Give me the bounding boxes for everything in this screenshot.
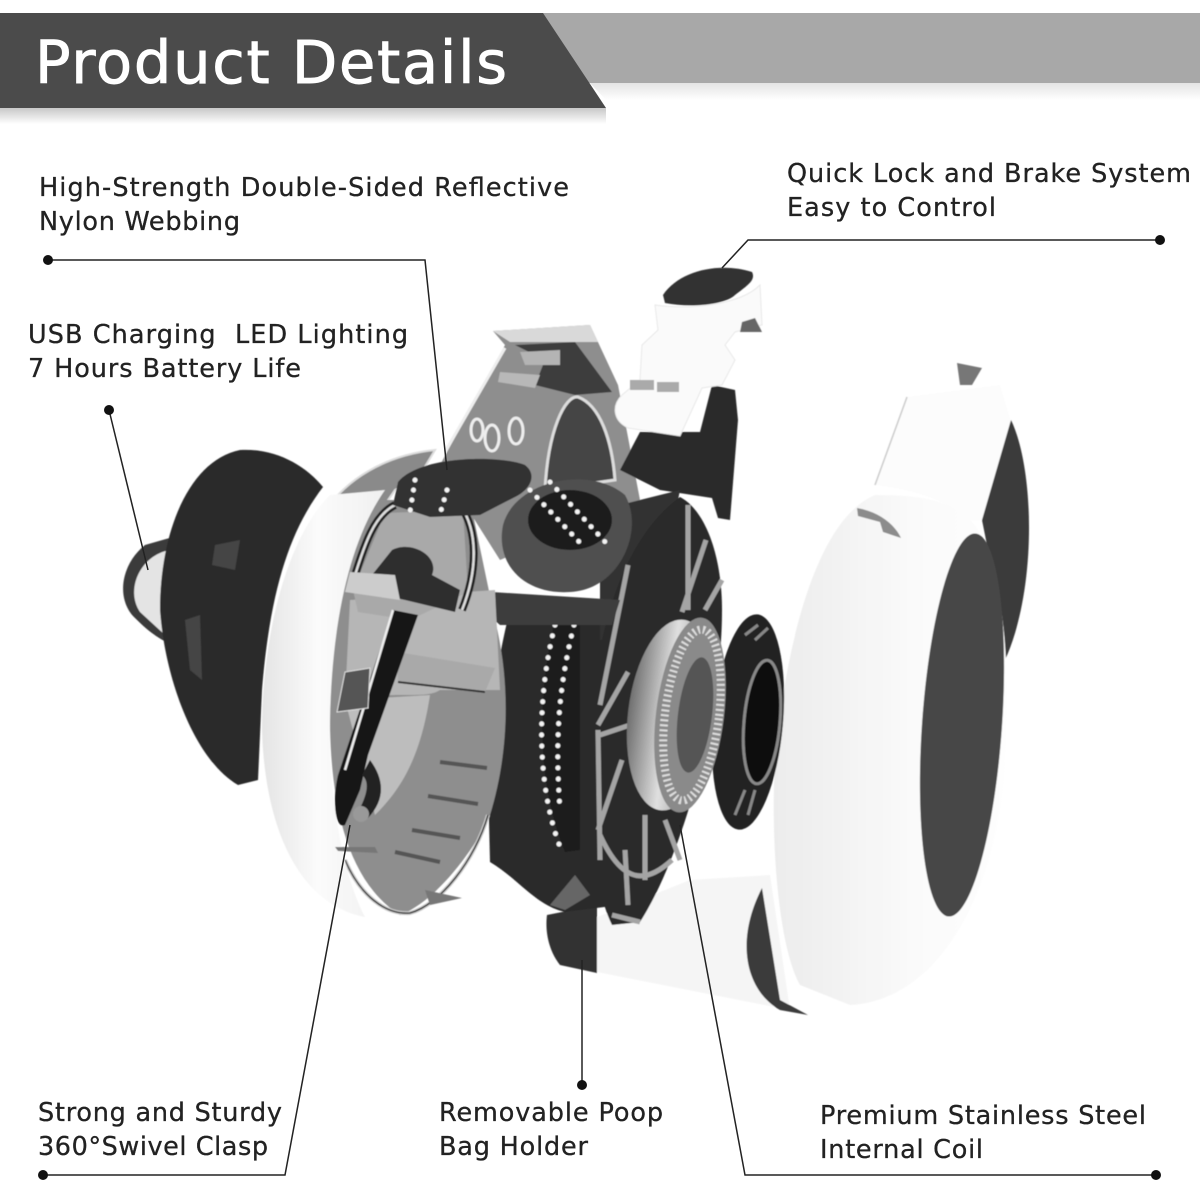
- callout: USB charging: [28, 320, 408, 570]
- poop bag holder: [546, 875, 808, 1015]
- front white shell: [262, 490, 506, 917]
- callout: USB charging: 7 Hours Battery Life: [28, 354, 301, 384]
- reel and reflective webbing: [488, 610, 620, 912]
- callout: USB charging: USB Charging LED Lighting: [28, 320, 408, 350]
- product illustration: [123, 268, 1029, 1015]
- right shell: [774, 363, 1029, 1005]
- callout: coil: [680, 825, 1161, 1180]
- callout: swivel clasp: [38, 825, 350, 1180]
- header banner: [0, 13, 1200, 124]
- stainless steel coil: [617, 614, 736, 816]
- callout: swivel clasp: Strong and Sturdy: [38, 1098, 282, 1128]
- callout: bag holder: Bag Holder: [439, 1132, 589, 1162]
- callout: reflective webbing: High-Strength Double-Sided Reflective: [39, 173, 569, 203]
- title: Product Details: [35, 28, 507, 97]
- swivel clasp and D-ring: [335, 459, 532, 826]
- callout: quick lock: Easy to Control: [787, 193, 996, 223]
- rear housing shell with holes: [325, 325, 640, 560]
- brake lever: [615, 268, 762, 520]
- callout: bag holder: Removable Poop: [439, 1098, 663, 1128]
- callout: swivel clasp: 360°Swivel Clasp: [38, 1132, 268, 1162]
- callout: coil: Internal Coil: [820, 1135, 983, 1165]
- callout: reflective webbing: [39, 173, 569, 470]
- reel frame with spokes: [591, 490, 722, 925]
- rear hub: [704, 611, 792, 833]
- callout: quick lock: [722, 159, 1191, 268]
- spool hub: [460, 479, 632, 625]
- callout: coil: Premium Stainless Steel: [820, 1101, 1146, 1131]
- callout: reflective webbing: Nylon Webbing: [39, 207, 240, 237]
- callout: quick lock: Quick Lock and Brake System: [787, 159, 1191, 189]
- LED lamp cover: [123, 450, 323, 785]
- callout: bag holder: [439, 960, 663, 1162]
